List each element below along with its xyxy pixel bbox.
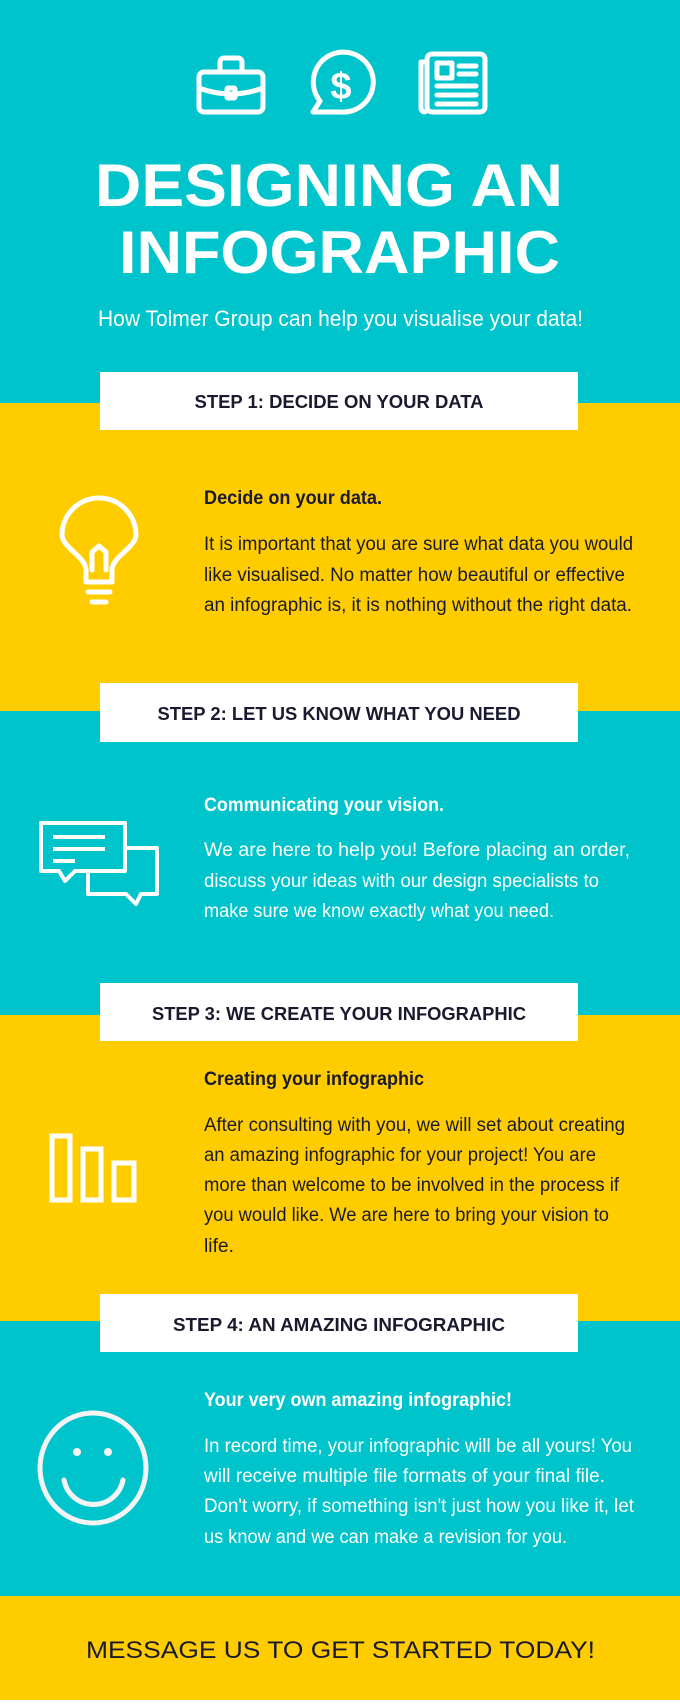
text: step 3: life.	[204, 1236, 234, 1257]
text: step 2: make sure we know exactly what you need.	[204, 901, 554, 922]
step 3 label: STEP 3: WE CREATE YOUR INFOGRAPHIC	[152, 1004, 526, 1024]
text: step 2: discuss your ideas with our design specialists to	[204, 871, 599, 892]
footer call to action: MESSAGE US TO GET STARTED TODAY!	[86, 1637, 595, 1664]
icon: smiley	[40, 1413, 146, 1523]
text: step 1	[204, 488, 633, 616]
text: step 4: us know and we can make a revision for you.	[204, 1527, 567, 1548]
text: step 1: Decide on your data.	[204, 488, 382, 509]
icon: briefcase	[199, 58, 263, 112]
text: step 2: Communicating your vision.	[204, 795, 444, 816]
step 3 label	[100, 983, 578, 1041]
step 4 label	[100, 1294, 578, 1352]
text: step 3: an amazing infographic for your project! You are	[204, 1145, 596, 1166]
text: step 2	[204, 795, 630, 922]
subtitle: How Tolmer Group can help you visualise your data!	[98, 306, 583, 331]
icon: bar chart	[52, 1136, 134, 1200]
text: step 1: like visualised. No matter how beautiful or effective	[204, 565, 625, 586]
step 2 label: STEP 2: LET US KNOW WHAT YOU NEED	[158, 704, 520, 724]
text: step 1: It is important that you are sure what data you would	[204, 534, 633, 555]
text: step 3	[204, 1069, 625, 1257]
icon: newspaper	[421, 54, 485, 112]
text: step 3: more than welcome to be involved in the process if	[204, 1175, 620, 1196]
step 2 label	[100, 683, 578, 742]
text: step 3: After consulting with you, we will set about creating	[204, 1115, 625, 1136]
title: DESIGNING AN	[95, 152, 563, 219]
text: step 4: Don't worry, if something isn't just how you like it, let	[204, 1496, 635, 1517]
title: INFOGRAPHIC	[119, 219, 560, 286]
step 1 label	[100, 372, 578, 430]
icon: chat bubbles	[41, 823, 157, 904]
step 4 label: STEP 4: AN AMAZING INFOGRAPHIC	[173, 1315, 505, 1335]
header icons	[199, 52, 485, 112]
icon: dollar bubble	[313, 52, 373, 112]
title	[95, 152, 563, 286]
text: step 4: will receive multiple file formats of your final file.	[203, 1466, 605, 1487]
text: step 2: We are here to help you! Before placing an order,	[204, 840, 630, 861]
text: step 1: an infographic is, it is nothing without the right data.	[204, 595, 632, 616]
text: step 3: Creating your infographic	[204, 1069, 424, 1090]
text: step 4: In record time, your infographic will be all yours! You	[204, 1436, 632, 1457]
text: step 4	[203, 1390, 635, 1548]
icon: light bulb	[62, 498, 136, 602]
step 1 label: STEP 1: DECIDE ON YOUR DATA	[194, 392, 484, 412]
text: step 3: you would like. We are here to bring your vision to	[204, 1205, 609, 1226]
icon: dollar bubble: $	[330, 66, 352, 108]
text: step 4: Your very own amazing infographic!	[204, 1390, 512, 1411]
